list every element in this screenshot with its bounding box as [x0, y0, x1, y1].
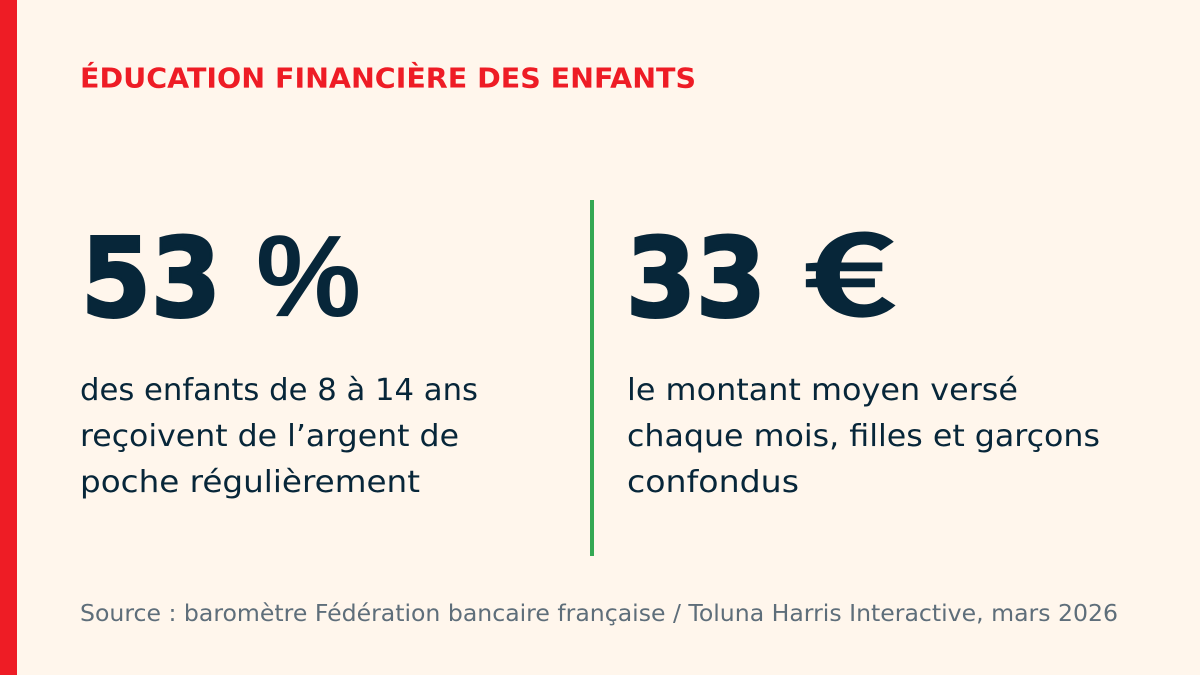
description right: le montant moyen versé — [627, 373, 1018, 408]
description left: des enfants de 8 à 14 ans — [80, 373, 478, 408]
panel: 33 euros — [626, 184, 1100, 500]
description left — [80, 373, 478, 500]
big number: 33 €: 33 — [626, 215, 766, 342]
big number: 53 %: % — [256, 211, 361, 341]
description right: chaque mois, filles et garçons — [627, 419, 1100, 454]
description left: reçoivent de l’argent de — [80, 419, 459, 454]
description right: confondus — [627, 465, 799, 500]
description right — [627, 373, 1100, 500]
big number: 33 € — [626, 184, 897, 350]
green divider — [590, 200, 594, 556]
source: Source : baromètre Fédération bancaire française / Toluna Harris Interactive, mars 2026 — [80, 601, 1118, 627]
description left: poche régulièrement — [80, 465, 420, 500]
big number: 53 % — [81, 211, 361, 342]
title: ÉDUCATION FINANCIÈRE DES ENFANTS — [80, 60, 696, 94]
big number: 53 %: 53 — [81, 215, 221, 342]
panel: 53 percent — [80, 211, 478, 500]
red side bar — [0, 0, 17, 675]
big number: 33 €: € — [802, 184, 897, 350]
